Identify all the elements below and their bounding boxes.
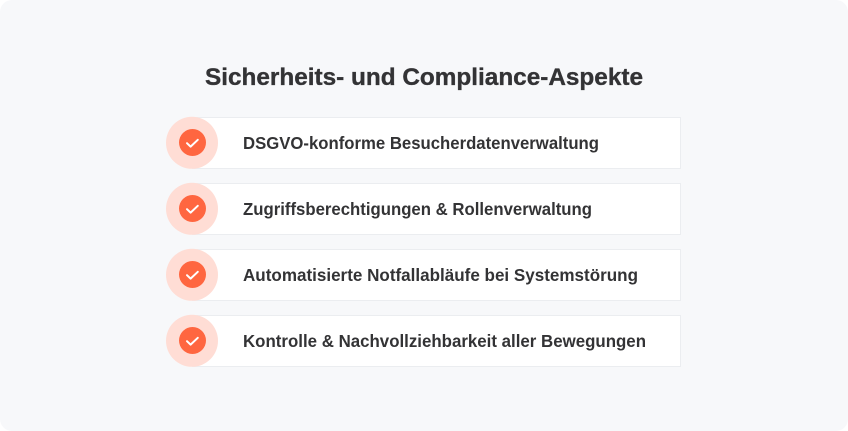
label: DSGVO-konforme Besucherdatenverwaltung bbox=[243, 133, 599, 153]
row card bbox=[192, 184, 680, 234]
list item: Notfall bbox=[166, 249, 680, 301]
icon: check badge bbox=[166, 315, 218, 367]
label: Kontrolle & Nachvollziehbarkeit aller Bewegungen bbox=[243, 331, 646, 351]
icon: check badge bbox=[166, 117, 218, 169]
icon: check badge bbox=[166, 183, 218, 235]
list item: Zugriff bbox=[166, 183, 680, 235]
title: Sicherheits- und Compliance-Aspekte bbox=[205, 64, 643, 91]
list item: DSGVO bbox=[166, 117, 680, 169]
row card bbox=[192, 118, 680, 168]
icon: check badge bbox=[166, 249, 218, 301]
row card bbox=[192, 250, 680, 300]
label: Automatisierte Notfallabläufe bei Systemstörung bbox=[243, 265, 638, 285]
row card bbox=[192, 316, 680, 366]
list item: Kontrolle bbox=[166, 315, 680, 367]
label: Zugriffsberechtigungen & Rollenverwaltung bbox=[243, 199, 592, 219]
